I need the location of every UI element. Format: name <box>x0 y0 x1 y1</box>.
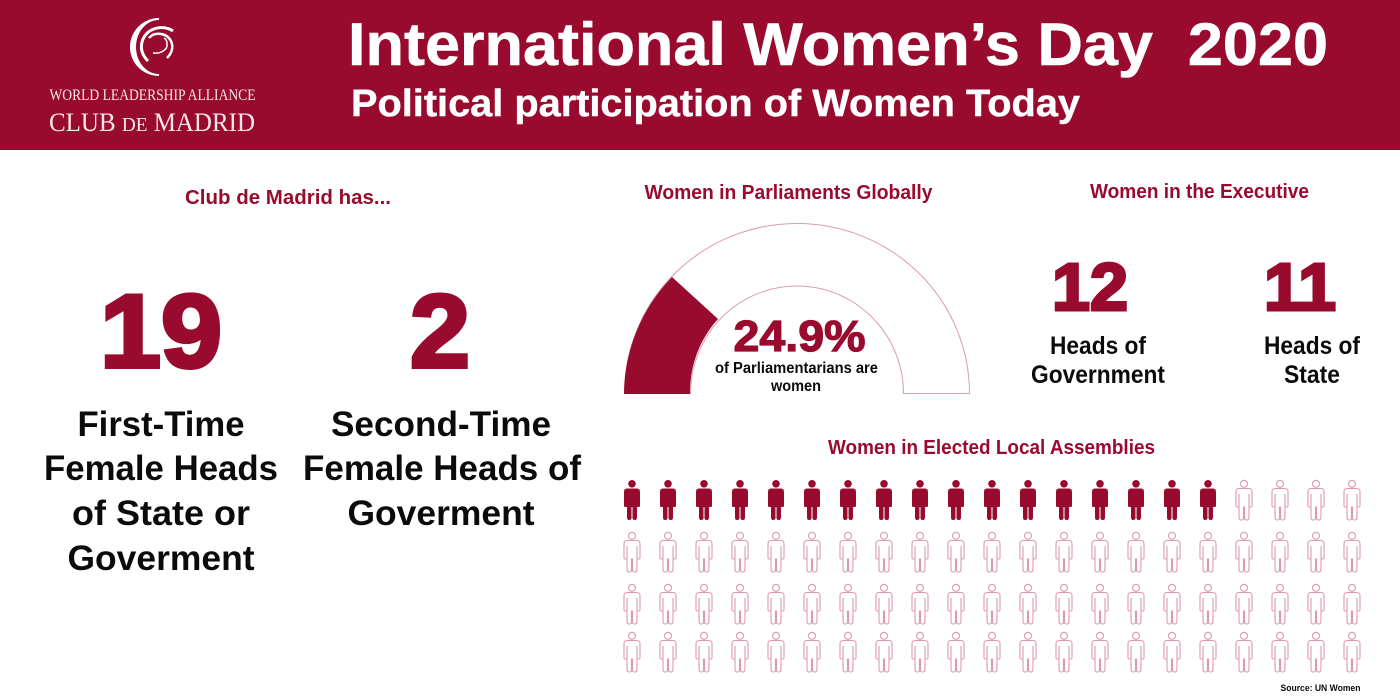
gauge caption: of Parliamentarians are <box>715 360 878 377</box>
stat: 19 first-time: Goverment <box>68 539 255 578</box>
stat: 19 first-time <box>44 274 278 578</box>
gauge chart <box>624 224 970 394</box>
heading: Club de Madrid has: Club de Madrid has... <box>185 187 391 209</box>
panel: women in elected local assemblies <box>624 437 1360 672</box>
stat: 12 heads of government: Heads of <box>1050 332 1147 360</box>
stat: 2 second-time: Goverment <box>348 494 535 533</box>
logo: Club de Madrid: WORLD LEADERSHIP ALLIANCE <box>50 87 256 104</box>
heading: Women in Parliaments Globally: Women in Parliaments Globally <box>644 182 933 204</box>
panel: women in the executive <box>1031 181 1361 389</box>
stat: 19 first-time: First-Time <box>78 405 244 444</box>
gauge caption: women <box>770 378 821 395</box>
stat: 19 first-time: Female Heads <box>44 449 278 488</box>
gauge caption <box>715 360 878 395</box>
pictogram row 1 <box>624 480 1360 520</box>
subtitle: Political participation of Women Today <box>351 83 1080 125</box>
header banner <box>0 0 1400 150</box>
pictogram row 3 <box>624 584 1360 624</box>
heading: Women in Elected Local Assemblies: Women in Elected Local Assemblies <box>828 437 1155 459</box>
logo: Club de Madrid <box>49 18 256 137</box>
stat: 12 heads of government: 12 <box>1052 250 1128 325</box>
panel: women in parliaments <box>624 182 970 395</box>
panel: Club de Madrid has <box>44 187 581 578</box>
stat: 2 second-time: Female Heads of <box>303 449 581 488</box>
title: International Women’s Day 2020 <box>348 11 1328 78</box>
stat: 2 second-time: Second-Time <box>331 405 551 444</box>
gauge value: 24.9% <box>734 312 866 361</box>
stat: 19 first-time: of State or <box>72 494 250 533</box>
stat: 11 heads of state: Heads of <box>1264 332 1361 360</box>
heading: Women in the Executive: Women in the Executive <box>1090 181 1309 203</box>
stat: 11 heads of state <box>1264 250 1361 389</box>
stat: 11 heads of state: State <box>1284 361 1340 389</box>
stat: 2 second-time <box>303 274 581 533</box>
stat: 12 heads of government: Government <box>1031 361 1166 389</box>
logo: Club de Madrid: CLUB DE MADRID <box>49 108 255 137</box>
stat: 19 first-time: 19 <box>100 274 222 390</box>
stat: 11 heads of state: 11 <box>1264 250 1336 325</box>
stat: 12 heads of government <box>1031 250 1166 389</box>
pictogram row 4 <box>624 632 1360 672</box>
stat: 2 second-time: 2 <box>410 274 470 390</box>
source note: Source: UN Women <box>1280 683 1361 694</box>
pictogram row 2 <box>624 532 1360 572</box>
